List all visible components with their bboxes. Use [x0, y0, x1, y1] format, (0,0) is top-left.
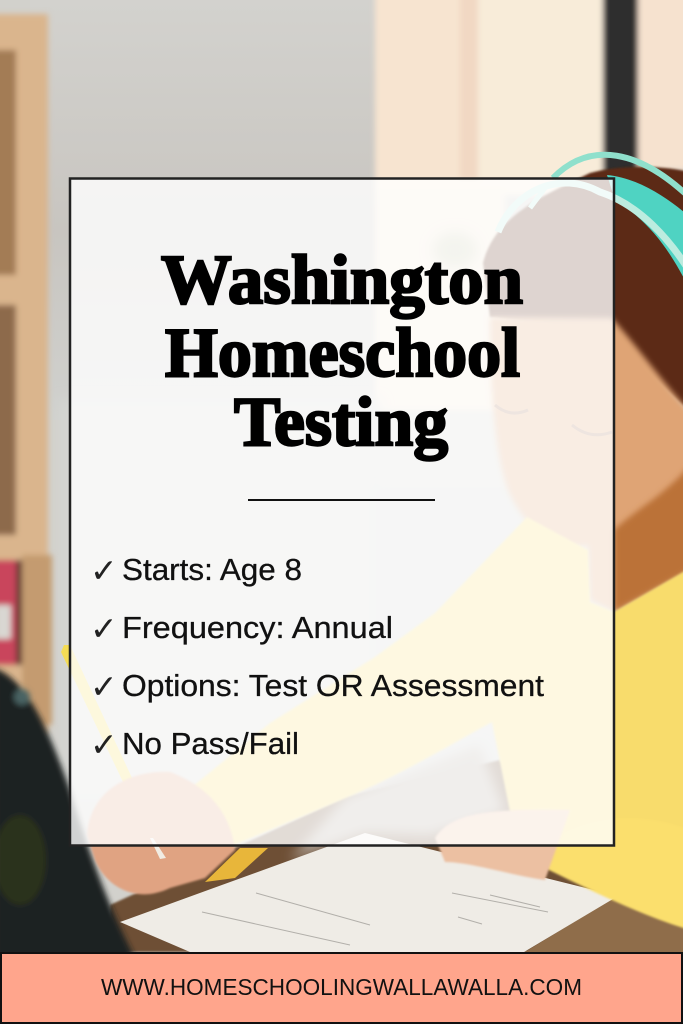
- footer banner: [1, 953, 682, 1023]
- divider: [248, 499, 435, 501]
- item: starts age: Starts: Age 8: [122, 552, 302, 587]
- title: Homeschool: [165, 315, 520, 392]
- title: Washington: [161, 242, 523, 319]
- headphones: [498, 155, 683, 290]
- desk: [110, 760, 683, 952]
- item: options: ✓: [90, 667, 118, 706]
- title: [161, 242, 523, 461]
- website url: WWW.HOMESCHOOLINGWALLAWALLA.COM: [101, 974, 582, 1000]
- item: frequency: ✓: [90, 609, 118, 648]
- yellow sweater: [192, 517, 683, 930]
- item: no pass/fail: No Pass/Fail: [122, 726, 299, 761]
- hair and face: [483, 167, 683, 412]
- translucent title panel: [70, 178, 614, 846]
- checklist: [90, 551, 544, 764]
- item: no pass/fail: ✓: [90, 725, 118, 764]
- worksheet: [120, 833, 618, 952]
- item: options: Options: Test OR Assessment: [122, 668, 544, 703]
- dark foreground shape: [0, 668, 135, 958]
- item: frequency: Frequency: Annual: [122, 610, 393, 645]
- hands and pencil: [61, 645, 133, 784]
- title: Testing: [234, 384, 448, 461]
- item: starts age: ✓: [90, 551, 118, 590]
- bookshelf: [0, 14, 52, 734]
